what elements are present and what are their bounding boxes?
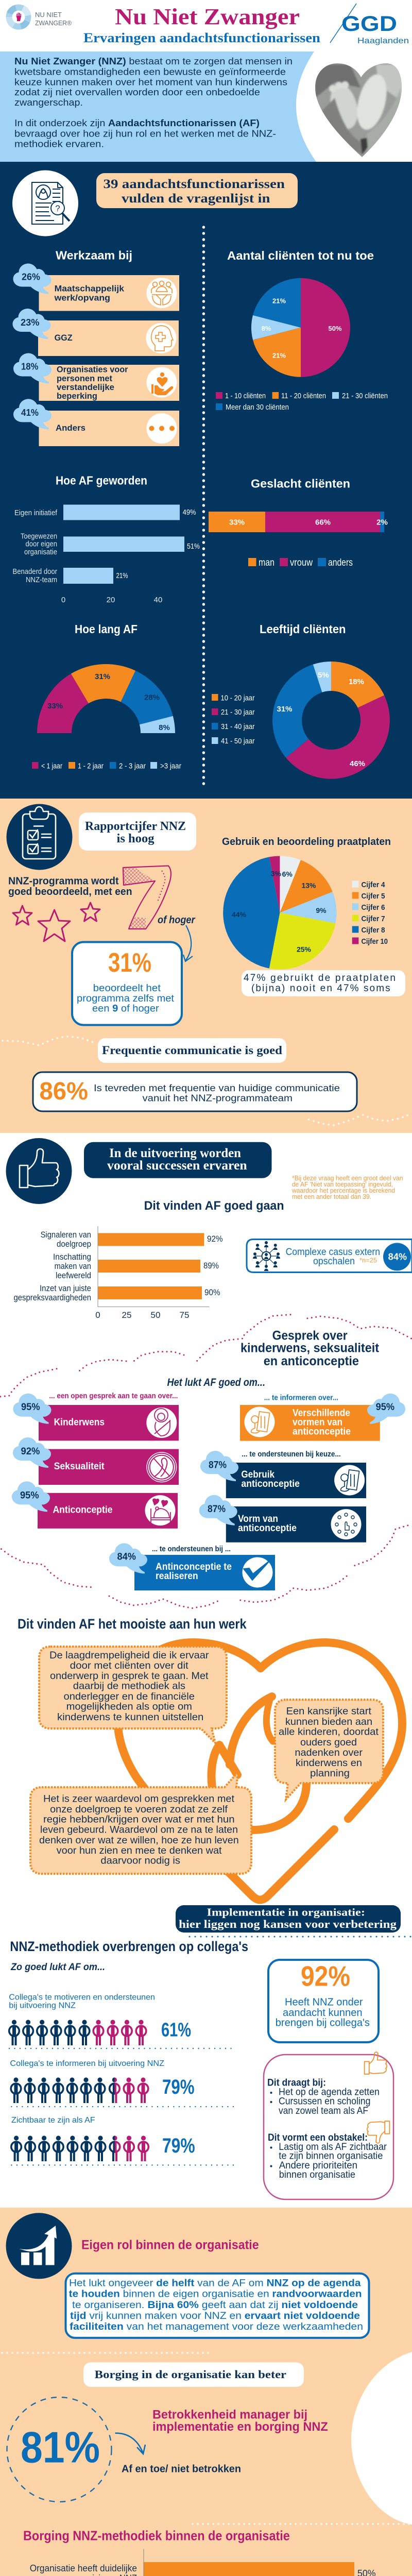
card: Anders: 41% — [21, 408, 39, 418]
legend: geslacht — [248, 557, 353, 568]
card: Organisaties verstandelijke beperking: beperking — [57, 391, 97, 401]
illustration: big seven — [123, 866, 171, 929]
chart: goed gaan: 25 — [122, 1310, 131, 1320]
legend: geslacht: man — [259, 557, 274, 568]
logo: GGD Haaglanden — [330, 4, 409, 45]
chart: hoe AF geworden: organisatie — [24, 548, 57, 556]
panel: bijdragen en obstakels: Het op de agenda zetten — [279, 2087, 380, 2098]
legend: leeftijd: 41 - 50 jaar — [221, 737, 254, 745]
quote: waardevol: onze doelgroep te voeren zodat ze zelf — [50, 1804, 228, 1815]
text: beoordeling: NNZ-programma wordt — [8, 876, 119, 887]
chart: pie praatplaten: 6% — [282, 870, 293, 878]
quote: laagdrempeligheid: door met cliënten over dit — [70, 1660, 188, 1671]
card: Gebruik anticonceptie — [200, 1451, 366, 1498]
card: Seksualiteit: Seksualiteit — [54, 1461, 105, 1472]
card: Kinderwens: 95% — [21, 1402, 40, 1413]
callout: complexe casus: *n=25 — [359, 1257, 377, 1264]
card: Organisaties verstandelijke beperking — [13, 353, 179, 401]
heading: overbrengen op collega's: NNZ-methodiek overbrengen op collega's — [10, 1939, 248, 1954]
card: Verschillende vormen: Verschillende — [293, 1408, 350, 1419]
callout: 92% — [268, 1960, 379, 2042]
callout: 86%: Is tevreden met frequentie van huidige communicatie — [94, 1082, 340, 1093]
legend: leeftijd: 31 - 40 jaar — [221, 722, 254, 731]
chart: goed gaan: 90% — [204, 1287, 220, 1297]
quote: laagdrempeligheid: onderwerp in gesprek te gaan. Met — [50, 1670, 209, 1682]
chart: pictogram 79% zichtbaar — [11, 2116, 195, 2161]
panel: bijdragen en obstakels: te zijn binnen organisatie — [279, 2151, 383, 2162]
callout: 86%: 86% — [39, 1078, 88, 1105]
card: Kinderwens — [13, 1394, 179, 1440]
chart: pie aantal cliënten: 21% — [272, 351, 286, 360]
heading: 39 respondents — [96, 173, 298, 208]
text: intro: zodat zij niet overvallen worden door een onbedoelde — [14, 87, 260, 97]
legend: hoe lang: >3 jaar — [160, 762, 181, 771]
heading: borging: Borging in de organisatie kan beter — [95, 2368, 286, 2381]
icon: thumbs up — [6, 1138, 72, 1204]
chart: hoe AF geworden: 21% — [116, 571, 128, 580]
heading: Geslacht cliënten: Geslacht cliënten — [251, 477, 350, 490]
heading: rapportcijfer: Rapportcijfer NNZ — [85, 820, 186, 833]
text: intro: In dit onderzoek zijn Aandachtsfunctionarissen (AF) — [14, 118, 260, 128]
chart: hoe AF geworden — [12, 505, 200, 604]
card: Verschillende vormen: anticonceptie — [293, 1426, 351, 1437]
chart: borging methodiek — [22, 2549, 401, 2576]
panel: introduction — [0, 52, 404, 162]
callout: 31%: programma zelfs met — [77, 993, 175, 1004]
chart: hoe AF geworden: Toegewezen — [21, 532, 57, 541]
callout: complexe casus: 84% — [388, 1252, 407, 1262]
card: Kinderwens: Kinderwens — [54, 1417, 105, 1428]
card: Maatschappelijk werk: werk/opvang — [54, 293, 110, 302]
card: Anticonceptie: Anticonceptie — [53, 1505, 112, 1516]
chart: half donut hoe lang AF — [32, 664, 181, 771]
heading: rapportcijfer: is hoog — [116, 832, 154, 845]
legend: cijfers: Cijfer 5 — [362, 892, 385, 901]
legend: cijfers: Cijfer 6 — [362, 903, 385, 912]
card: Organisaties verstandelijke beperking: personen met — [57, 374, 112, 383]
legend: cijfers — [352, 880, 388, 946]
text: intro — [14, 56, 293, 149]
heading: praatplaten: Gebruik en beoordeling praatplaten — [222, 836, 391, 848]
heading: uitvoering: vooral successen ervaren — [107, 1159, 247, 1173]
heading: Hoe AF geworden: Hoe AF geworden — [56, 474, 147, 487]
quote: waardevol: daarvoor nodig is — [100, 1855, 180, 1867]
panel: bijdragen en obstakels: binnen organisatie — [279, 2170, 355, 2180]
card: Organisaties verstandelijke beperking: 18% — [21, 362, 38, 372]
legend: hoe lang: 1 - 2 jaar — [78, 762, 104, 771]
quote: laagdrempeligheid: De laagdrempeligheid die ik ervaar — [49, 1650, 209, 1661]
note: n=25 — [291, 1175, 403, 1200]
chart: pictogram 79% informeren: Collega's te informeren bij uitvoering NNZ — [10, 2059, 164, 2068]
legend: aantal cliënten: Meer dan 30 cliënten — [226, 403, 289, 412]
callout: praatplaten gebruik: (bijna) nooit en 47% soms — [251, 983, 390, 994]
card: Maatschappelijk werk: Maatschappelijk — [55, 283, 125, 294]
icon: growth chart — [6, 2213, 72, 2279]
heading: 39 respondents: 39 aandachtsfunctionarissen — [103, 177, 285, 191]
heading: gesprek — [241, 1329, 380, 1368]
legend: aantal cliënten: 21 - 30 cliënten — [342, 392, 388, 400]
note: n=25: de AF 'Niet van toepassing' ingevuld, — [292, 1181, 393, 1188]
chart: geslacht cliënten — [209, 512, 388, 568]
legend: aantal cliënten: 11 - 20 cliënten — [281, 392, 326, 400]
chart: half donut hoe lang AF: 28% — [144, 693, 160, 702]
card: Verschillende vormen: 95% — [376, 1402, 394, 1413]
chart: pie aantal cliënten — [251, 278, 350, 377]
quote: laagdrempeligheid: onderlegger en de financiële — [64, 1691, 195, 1702]
panel: bijdragen en obstakels: Dit vormt een obstakel: — [268, 2132, 368, 2143]
card: Vorm van anticonceptie — [199, 1495, 366, 1543]
chart: borging methodiek: Organisatie heeft duidelijke — [30, 2563, 137, 2573]
chart: pictogram 79% zichtbaar: Zichtbaar te zijn als AF — [11, 2116, 95, 2125]
panel: bijdragen en obstakels: Andere prioriteiten — [279, 2160, 357, 2171]
heading: borging — [83, 2362, 304, 2387]
quote: laagdrempeligheid: kinderwens te kunnen uitstellen — [57, 1711, 203, 1723]
quote: waardevol: denken over wat ze willen, hoe ze hun leven — [39, 1835, 239, 1846]
heading: rapportcijfer — [79, 812, 196, 851]
heading: borging methodiek: Borging NNZ-methodiek binnen de organisatie — [23, 2528, 290, 2543]
chart: goed gaan: 89% — [203, 1261, 219, 1270]
text: beoordeling — [8, 876, 132, 897]
legend: geslacht: vrouw — [290, 557, 313, 568]
callout: eigen rol: Het lukt ongeveer de helft van de AF om NNZ op de agenda — [69, 2278, 361, 2289]
heading: implementatie — [176, 1905, 401, 1933]
chart: donut leeftijd cliënten: 31% — [277, 705, 293, 714]
text: beoordeling: goed beoordeeld, met een — [8, 886, 132, 897]
callout: 86%: vanuit het NNZ-programmateam — [142, 1093, 293, 1104]
quote: kansrijke start: planning — [310, 1768, 350, 1779]
heading: uitvoering — [84, 1142, 272, 1178]
card: Anticonceptie: 95% — [20, 1490, 39, 1501]
quote: kansrijke start — [275, 1700, 383, 1800]
text: intro: kwetsbare omstandigheden een bewuste en geïnformeerde — [14, 66, 286, 77]
heading: 39 respondents: vulden de vragenlijst in — [122, 192, 270, 206]
chart: pie praatplaten: 44% — [232, 910, 247, 919]
logo: Nu Niet Zwanger — [6, 4, 72, 30]
chart: goed gaan: 50 — [151, 1310, 160, 1320]
logo: Nu Niet Zwanger: ZWANGER® — [35, 19, 72, 27]
quote: waardevol — [30, 1772, 251, 1874]
card: GGZ — [12, 309, 179, 356]
legend: leeftijd: 10 - 20 jaar — [220, 693, 254, 703]
chart: pie praatplaten — [223, 856, 388, 970]
icon: document with magnifier: ? — [55, 204, 60, 213]
chart: pictogram 61%: 61% — [161, 2020, 191, 2041]
quote: kansrijke start: alle kinderen, doordat — [279, 1726, 379, 1738]
chart: pie aantal cliënten: 8% — [262, 325, 271, 332]
chart: pictogram 61%: Collega's te motiveren en ondersteunen — [9, 1993, 155, 2002]
heading: goed gaan: Dit vinden AF goed gaan — [144, 1199, 284, 1213]
logo: GGD Haaglanden: GGD — [341, 11, 397, 36]
callout: complexe casus: Complexe casus extern — [286, 1247, 380, 1258]
legend: aantal cliënten — [216, 392, 388, 412]
quote: laagdrempeligheid — [39, 1647, 227, 1743]
chart: goed gaan: gespreksvaardigheden — [13, 1293, 91, 1302]
card: Gebruik anticonceptie: anticonceptie — [241, 1479, 300, 1489]
chart: pictogram 61% — [9, 1993, 191, 2045]
subtitle: Ervaringen aandachtsfunctionarissen — [83, 30, 321, 45]
heading: gesprek: en anticonceptie — [264, 1354, 359, 1368]
heading: betrokkenheid: Betrokkenheid manager bij — [152, 2408, 307, 2422]
panel: borging background — [0, 2208, 412, 2576]
card: Anticonceptie — [12, 1481, 178, 1529]
chart: goed gaan — [13, 1226, 223, 1320]
callout: eigen rol: te organiseren. Bijna 60% geeft aan dat zij niet voldoende — [72, 2300, 358, 2311]
chart: goed gaan: maken van — [55, 1261, 91, 1271]
chart: pictogram 79% zichtbaar: 79% — [162, 2134, 195, 2157]
note: n=25: met een ander totaal dan 39. — [292, 1193, 371, 1200]
note: n=25: waardoor het percentage is berekend — [291, 1187, 395, 1194]
callout: eigen rol: te houden binnen de eigen organisatie en randvoorwaarden — [69, 2289, 362, 2300]
quote: laagdrempeligheid: mogelijkheden als optie om — [66, 1701, 192, 1713]
caption: ondersteunen: ... te ondersteunen bij ... — [152, 1545, 231, 1553]
quote: kansrijke start: kinderwens en — [296, 1757, 362, 1769]
heading: implementatie: Implementatie in organisatie: — [207, 1906, 365, 1919]
legend: leeftijd — [212, 693, 254, 745]
callout: 31%: een 9 of hoger — [92, 1004, 159, 1014]
chart: goed gaan: 75 — [180, 1310, 189, 1320]
stat: 81% in dashed circle — [7, 2397, 111, 2502]
panel: bijdragen en obstakels — [264, 2052, 393, 2199]
text: intro: methodiek ervaren. — [14, 139, 104, 149]
quote: kansrijke start: nadenken over — [295, 1747, 363, 1758]
card: Vorm van anticonceptie: anticonceptie — [238, 1523, 297, 1534]
legend: leeftijd: 21 - 30 jaar — [221, 708, 254, 717]
legend: geslacht: anders — [328, 557, 353, 568]
note: n=25: *Bij deze vraag heeft een groot deel van — [292, 1175, 403, 1182]
subheading: zo goed lukt: Zo goed lukt AF om... — [10, 1962, 105, 1973]
chart: goed gaan: 92% — [207, 1234, 223, 1244]
card: Organisaties verstandelijke beperking: verstandelijke — [57, 382, 114, 392]
heading: implementatie: hier liggen nog kansen voor verbetering — [179, 1918, 397, 1930]
card: Anders — [13, 399, 179, 446]
card: Maatschappelijk werk — [13, 264, 179, 311]
illustration: orange heart — [118, 1642, 402, 1900]
title: Nu Niet Zwanger — [115, 4, 300, 29]
panel: bijdragen en obstakels: Lastig om als AF zichtbaar — [279, 2142, 387, 2153]
quote: kansrijke start: ouders goed — [300, 1737, 357, 1748]
card: Seksualiteit: 92% — [21, 1446, 40, 1457]
legend: cijfers: Cijfer 7 — [362, 914, 385, 923]
card: Verschillende vormen — [240, 1394, 405, 1441]
panel: bijdragen en obstakels: Dit draagt bij: — [267, 2078, 326, 2089]
caption: open gesprek: ... een open gesprek aan te gaan over... — [49, 1392, 178, 1400]
callout: eigen rol — [66, 2274, 369, 2338]
text: af en toe: Af en toe/ niet betrokken — [122, 2464, 241, 2475]
chart: donut leeftijd cliënten: 5% — [318, 671, 329, 680]
icon: clipboard — [6, 804, 72, 870]
caption: informeren: ... te informeren over... — [264, 1394, 338, 1402]
heading: Aantal cliënten: Aantal cliënten tot nu toe — [227, 249, 374, 262]
chart: hoe AF geworden: 51% — [187, 542, 200, 551]
card: Gebruik anticonceptie: Gebruik — [241, 1469, 274, 1480]
card: anticonceptie realiseren — [109, 1543, 275, 1590]
legend: cijfers: Cijfer 8 — [362, 926, 385, 935]
callout: 92%: Heeft NNZ onder — [285, 1997, 363, 2008]
chart: half donut hoe lang AF: 31% — [95, 672, 110, 681]
chart: donut leeftijd cliënten: 46% — [350, 759, 365, 768]
photo: baby feet in heart — [315, 63, 402, 157]
quote: waardevol: Het is zeer waardevol om gesprekken met — [43, 1793, 235, 1805]
chart: pie aantal cliënten: 50% — [328, 325, 342, 332]
chart: hoe AF geworden: door eigen — [26, 540, 57, 549]
chart: pie praatplaten: 13% — [301, 881, 316, 889]
stat: 81% in dashed circle: 81% — [21, 2424, 100, 2472]
heading: Leeftijd cliënten: Leeftijd cliënten — [260, 622, 346, 636]
icon: document with magnifier — [12, 170, 78, 236]
chart: pie aantal cliënten: 21% — [272, 297, 286, 305]
chart: hoe AF geworden: Eigen initiatief — [14, 509, 58, 517]
panel: bijdragen en obstakels: Cursussen en scholing — [279, 2096, 370, 2107]
card: Vorm van anticonceptie: 87% — [208, 1504, 226, 1515]
chart: donut leeftijd cliënten — [212, 662, 390, 779]
chart: hoe AF geworden: Benaderd door — [12, 567, 57, 576]
icon: network — [253, 1241, 280, 1271]
text: intro: bevraagd over hoe zij hun rol en het werken met de NNZ- — [14, 128, 276, 139]
heading: uitvoering: In de uitvoering worden — [109, 1146, 241, 1160]
callout: 31%: 31% — [108, 948, 151, 978]
chart: half donut hoe lang AF: 33% — [47, 702, 63, 710]
legend: hoe lang — [32, 762, 181, 771]
legend: hoe lang: 2 - 3 jaar — [119, 762, 146, 771]
chart: hoe AF geworden: 49% — [183, 508, 196, 517]
chart: donut leeftijd cliënten: 18% — [349, 677, 364, 686]
card: Seksualiteit — [13, 1437, 179, 1485]
card: GGZ: GGZ — [55, 333, 73, 343]
text: of hoger: of hoger — [158, 914, 196, 926]
card: GGZ: 23% — [21, 317, 39, 328]
callout: 86% — [33, 1072, 357, 1111]
legend: aantal cliënten: 1 - 10 cliënten — [225, 392, 266, 400]
panel: bijdragen en obstakels: van zowel team als AF — [279, 2106, 368, 2116]
legend: hoe lang: < 1 jaar — [41, 762, 62, 771]
icon: thumb up — [365, 2052, 387, 2074]
callout: 31%: beoordeelt het — [93, 983, 161, 994]
arrow: of hoger to 31% — [183, 925, 193, 961]
card: Vorm van anticonceptie: Vorm van — [238, 1514, 278, 1524]
callout: 92%: 92% — [301, 1960, 350, 1992]
chart: pictogram 61%: bij uitvoering NNZ — [9, 2002, 76, 2010]
quote: waardevol: leven gebeurd. Waardevol om ze na te laten — [40, 1824, 238, 1835]
chart: hoe AF geworden: 0 — [61, 596, 65, 604]
card: anticonceptie realiseren: realiseren — [156, 1571, 198, 1582]
heading: betrokkenheid — [152, 2408, 328, 2434]
chart: geslacht cliënten: 33% — [229, 518, 245, 527]
callout: 92%: aandacht kunnen — [283, 2007, 363, 2019]
heading: betrokkenheid: implementatie en borging NNZ — [152, 2420, 328, 2434]
chart: hoe AF geworden: 20 — [107, 596, 115, 604]
chart: pie praatplaten: 3% — [271, 870, 282, 878]
caption: ondersteunen keuze: ... te ondersteunen bij keuze... — [242, 1450, 341, 1459]
chart: pie praatplaten: 9% — [316, 906, 327, 914]
callout: 31% — [72, 942, 182, 1025]
text: intro: Nu Niet Zwanger (NNZ) bestaat om te zorgen dat mensen in — [14, 56, 293, 66]
chart: geslacht cliënten: 66% — [315, 518, 331, 527]
logo: Nu Niet Zwanger: NU NIET — [35, 11, 62, 19]
heading: frequentie communicatie: Frequentie communicatie is goed — [102, 1044, 282, 1057]
callout: eigen rol: faciliteiten van het management voor deze werkzaamheden — [70, 2321, 363, 2332]
text: intro: zwangerschap. — [14, 97, 83, 108]
callout: complexe casus: opschalen — [313, 1256, 355, 1267]
chart: goed gaan: Inzet van juiste — [40, 1283, 91, 1293]
chart: hoe AF geworden: 40 — [154, 596, 162, 604]
chart: goed gaan: Inschatting — [53, 1252, 91, 1262]
callout: complexe casus — [247, 1240, 412, 1273]
arrow: 81% to betrokkenheid — [115, 2433, 145, 2454]
chart: goed gaan: doelgroep — [57, 1239, 91, 1249]
header — [6, 4, 409, 45]
panel: beoordeling background — [0, 799, 412, 1133]
heading: eigen rol: Eigen rol binnen de organisatie — [81, 2238, 259, 2252]
heading: gesprek: Gesprek over — [272, 1329, 348, 1343]
card: anticonceptie realiseren: 84% — [117, 1552, 136, 1562]
quote: waardevol: voor hun zien en mee te denken wat — [57, 1845, 222, 1856]
legend: cijfers: Cijfer 4 — [362, 880, 385, 889]
chart: pictogram 79% informeren — [10, 2059, 195, 2103]
quote: kansrijke start: Een kansrijke start — [286, 1706, 372, 1717]
icon: thumb down — [367, 2121, 389, 2143]
logo: GGD Haaglanden: Haaglanden — [357, 37, 409, 45]
heading: Werkzaam bij: Werkzaam bij — [56, 249, 132, 262]
heading: frequentie communicatie — [98, 1038, 286, 1063]
card: Maatschappelijk werk: 26% — [22, 272, 40, 282]
card: Gebruik anticonceptie: 87% — [209, 1460, 227, 1470]
chart: goed gaan: 0 — [95, 1310, 100, 1320]
chart: goed gaan: leefwereld — [56, 1270, 91, 1280]
quote: kansrijke start: kunnen bieden aan — [285, 1716, 372, 1727]
subheading: het lukt AF: Het lukt AF goed om... — [167, 1377, 265, 1388]
chart: pie praatplaten: 25% — [297, 945, 312, 953]
panel: respondents background — [0, 162, 412, 799]
chart: half donut hoe lang AF: 8% — [159, 723, 170, 732]
card: Organisaties verstandelijke beperking: Organisaties voor — [57, 365, 128, 375]
legend: cijfers: Cijfer 10 — [362, 937, 388, 946]
text: intro: keuze kunnen maken over het moment van hun kinderwens — [14, 77, 287, 87]
chart: goed gaan: Signaleren van — [41, 1230, 91, 1240]
callout: eigen rol: tijd vrij kunnen maken voor NNZ en ervaart niet voldoende — [70, 2311, 360, 2321]
chart: hoe AF geworden: NNZ-team — [26, 575, 57, 584]
card: Verschillende vormen: vormen van — [293, 1417, 342, 1428]
heading: gesprek: kinderwens, seksualiteit — [241, 1341, 380, 1355]
chart: geslacht cliënten: 2% — [376, 518, 388, 527]
callout: praatplaten gebruik — [242, 970, 405, 996]
quote: laagdrempeligheid: daarbij de methodiek als — [73, 1681, 185, 1692]
quote: waardevol: regie hebben/krijgen over wat er met hun — [43, 1814, 235, 1825]
card: Anders: Anders — [56, 423, 85, 433]
card: anticonceptie realiseren: Antinconceptie te — [156, 1562, 232, 1572]
callout: 92%: brengen bij collega's — [276, 2017, 370, 2028]
icon: stars — [13, 903, 100, 941]
heading: Hoe lang AF: Hoe lang AF — [75, 622, 138, 636]
callout: praatplaten gebruik: 47% gebruikt de praatplaten — [244, 973, 396, 984]
chart: pictogram 79% informeren: 79% — [162, 2076, 195, 2098]
heading: mooiste aan werk: Dit vinden AF het mooiste aan hun werk — [18, 1616, 247, 1632]
